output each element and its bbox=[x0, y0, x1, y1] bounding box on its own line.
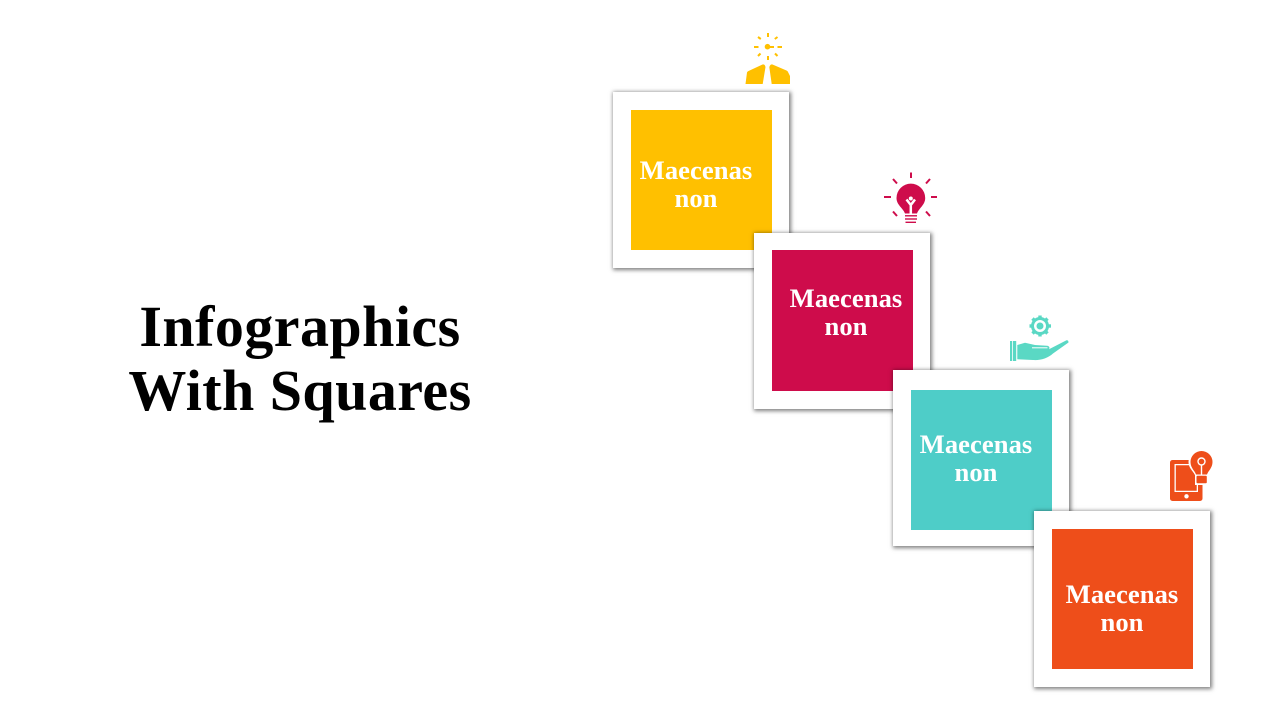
teal label bbox=[920, 429, 1032, 487]
title: Infographics bbox=[139, 294, 461, 359]
teal inner square bbox=[911, 390, 1052, 530]
crimson inner square bbox=[772, 250, 913, 391]
crimson label: non bbox=[824, 311, 868, 341]
orange inner square bbox=[1052, 529, 1193, 669]
icon: teal hand holding gear bbox=[1010, 316, 1068, 361]
teal label: Maecenas bbox=[920, 429, 1032, 459]
orange label: Maecenas bbox=[1066, 579, 1178, 609]
crimson label: Maecenas bbox=[790, 283, 902, 313]
orange label bbox=[1066, 579, 1178, 637]
yellow inner square bbox=[631, 110, 772, 250]
title: With Squares bbox=[128, 358, 472, 423]
panel: crimson square card bbox=[754, 233, 930, 409]
yellow label: Maecenas bbox=[640, 155, 752, 185]
panel: teal square card bbox=[893, 370, 1069, 546]
orange label: non bbox=[1100, 607, 1144, 637]
icon: yellow hands with sparkle bbox=[746, 33, 790, 84]
title bbox=[128, 294, 472, 423]
panel: yellow square card bbox=[613, 92, 789, 268]
crimson label bbox=[790, 283, 902, 341]
panel: orange square card bbox=[1034, 511, 1210, 687]
teal label: non bbox=[954, 457, 998, 487]
icon: orange tablet with bulb bbox=[1170, 449, 1214, 501]
icon: crimson light bulb bbox=[884, 172, 937, 222]
yellow label: non bbox=[674, 183, 718, 213]
yellow label bbox=[640, 155, 752, 213]
